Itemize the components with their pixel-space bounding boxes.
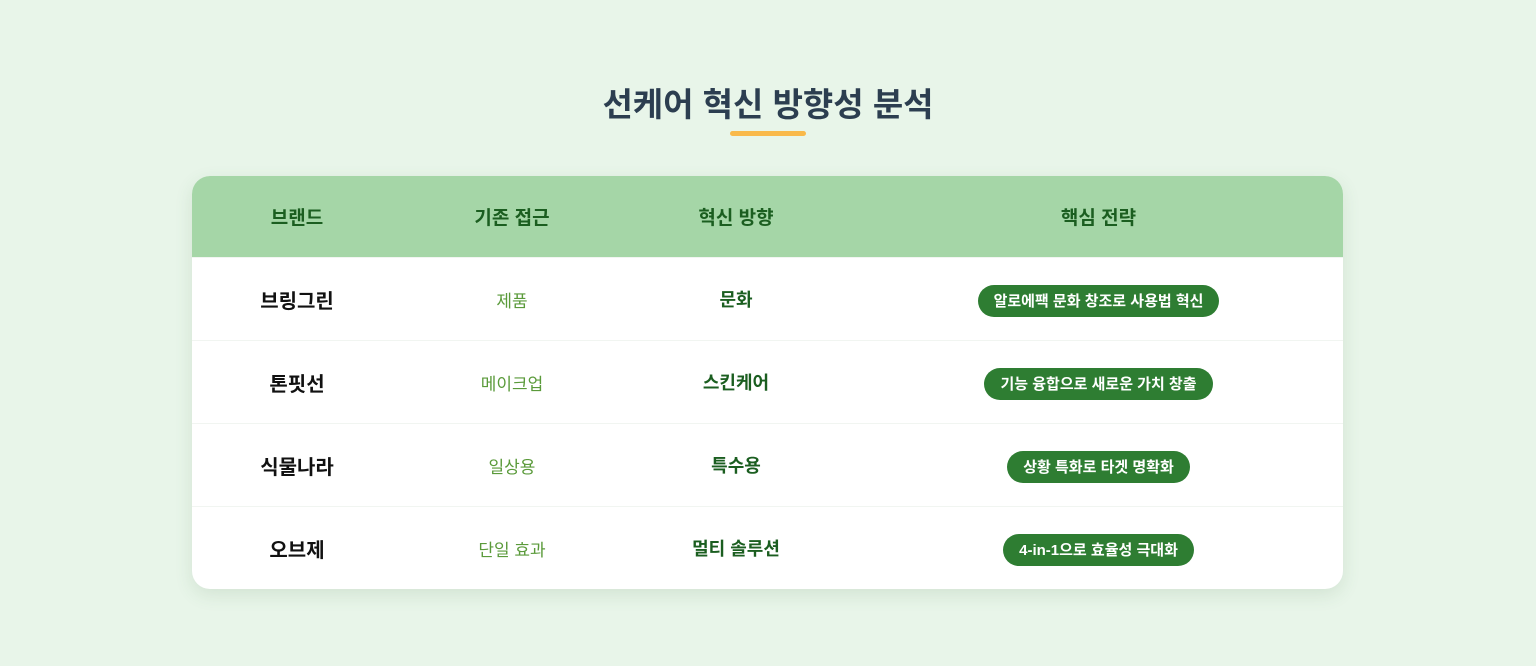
row: 톤핏선	[192, 340, 1343, 423]
title underline	[730, 131, 806, 136]
row: 브링그린: 제품	[496, 292, 528, 310]
row: 브링그린: 알로에팩 문화 창조로 사용법 혁신	[994, 293, 1203, 310]
table header: 핵심 전략	[1061, 208, 1136, 229]
row: 톤핏선: 메이크업	[481, 374, 543, 394]
table header: 기존 접근	[474, 208, 550, 229]
row: 브링그린	[192, 257, 1343, 340]
row: 오브제	[192, 506, 1343, 589]
table header: 브랜드	[271, 208, 323, 229]
table header: 혁신 방향	[698, 208, 774, 229]
row: 톤핏선: 스킨케어	[703, 373, 769, 393]
row: 식물나라: 특수용	[711, 456, 761, 476]
row: 식물나라: 상황 특화로 타겟 명확화	[1023, 459, 1174, 476]
row: 식물나라: 일상용	[489, 458, 535, 476]
row: 오브제: 단일 효과	[478, 540, 546, 560]
row: 톤핏선: 톤핏선	[269, 374, 325, 396]
row: 톤핏선: 기능 융합으로 새로운 가치 창출	[1000, 376, 1197, 393]
table header	[192, 176, 1343, 257]
row: 오브제: 4-in-1으로 효율성 극대화	[1019, 542, 1178, 559]
row: 브링그린: 문화	[719, 290, 753, 310]
title: 선케어 혁신 방향성 분석	[602, 86, 934, 123]
row: 오브제: 오브제	[269, 540, 325, 562]
row: 오브제: 멀티 솔루션	[692, 539, 780, 559]
table: innovation analysis	[192, 176, 1343, 589]
row: 브링그린: 브링그린	[260, 290, 334, 312]
row: 식물나라	[192, 423, 1343, 506]
row: 식물나라: 식물나라	[260, 456, 334, 478]
